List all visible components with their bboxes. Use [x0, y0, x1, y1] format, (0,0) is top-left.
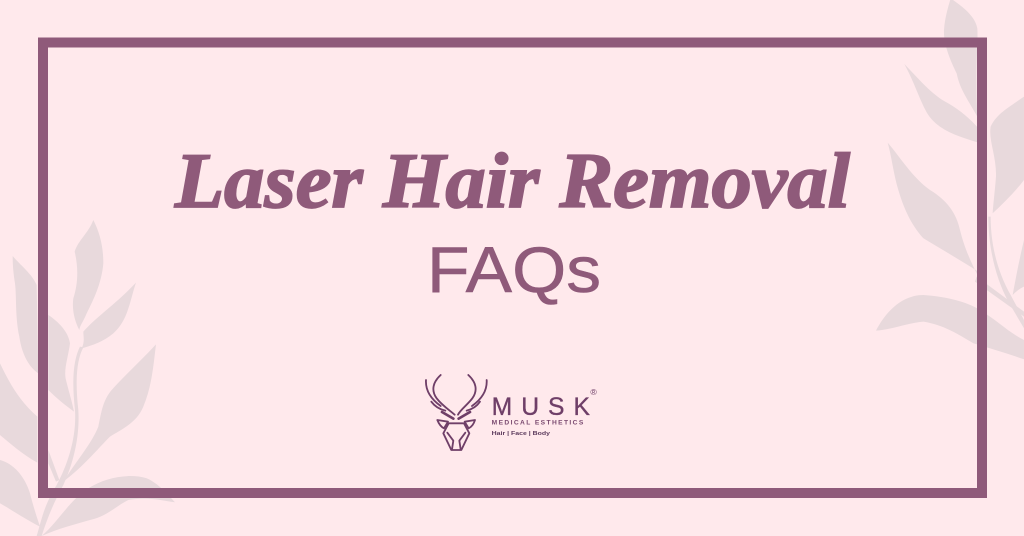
logo tagline: MEDICAL ESTHETICS — [492, 419, 584, 426]
subtitle: FAQs — [427, 233, 601, 306]
icon: deer head — [426, 375, 487, 450]
wordmark: MUSK — [492, 394, 591, 421]
foliage: top right leaves — [876, 0, 1024, 359]
foliage: bottom left leaves — [0, 220, 175, 536]
title: Laser Hair Removal — [174, 137, 850, 224]
logo services line: Hair | Face | Body — [492, 431, 551, 437]
registered mark: ® — [590, 387, 597, 397]
logo — [426, 375, 597, 450]
decorative frame — [43, 42, 982, 493]
